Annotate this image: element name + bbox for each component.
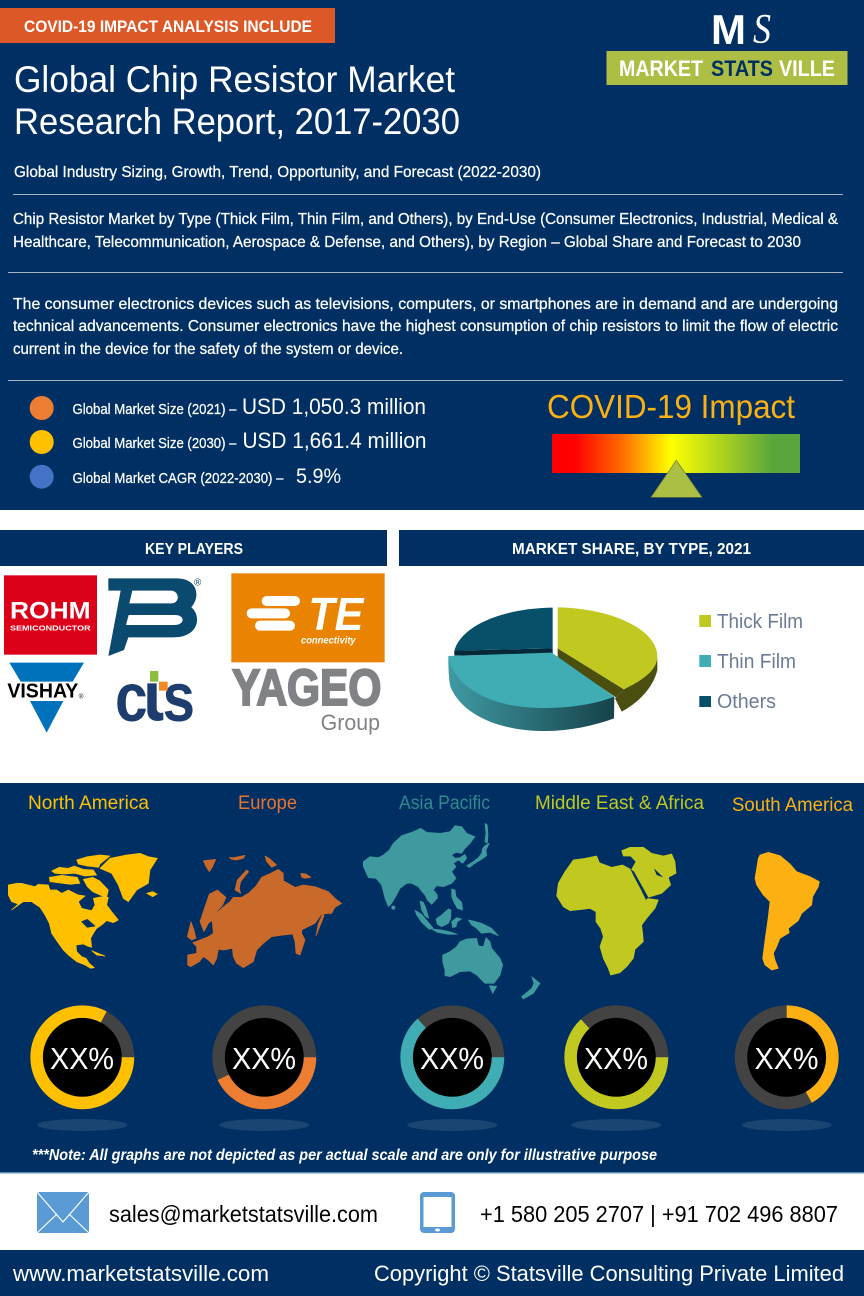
region label: south america: South America [732,795,853,816]
text block: market description [13,296,838,358]
legend item: others: Others [717,691,776,713]
chart: 3d pie [448,607,657,731]
text block: report scope [13,211,838,251]
panel: header [0,0,864,510]
logo: vishay [7,663,84,733]
panel: market share by type [399,530,864,731]
logo: te connectivity: connectivity [301,635,356,646]
logo: cts: s [163,660,195,736]
panel: regional outlook [0,783,864,1174]
logo: yageo group: Group [321,710,380,735]
stat: market size 2021 [30,394,426,420]
logo: market stats ville: STATS [711,56,773,81]
region label: asia pacific: Asia Pacific [399,793,490,814]
donut: middle east and africa [571,1012,662,1131]
logo: vishay: VISHAY [7,681,78,703]
pie slice: others [454,608,553,656]
logo: market stats ville: M [711,6,746,53]
stat: market size 2030: USD 1,661.4 million [242,428,426,453]
chart: impact gauge [552,434,800,497]
heading: market share [399,530,864,566]
donut: asia pacific: XX% [420,1041,484,1076]
heading: covid-19 impact: COVID-19 Impact [547,388,795,425]
donut: north america [37,1012,128,1131]
logo: market stats ville [606,6,848,85]
map: south america [755,852,819,970]
logo: te connectivity [231,573,385,662]
footer: copyright: Copyright © Statsville Consulting Private Limited [374,1261,844,1286]
banner: covid analysis: COVID-19 IMPACT ANALYSIS INCLUDE [24,18,312,36]
donut: south america [741,1012,832,1131]
title [14,59,460,142]
text block: market description: The consumer electronics devices such as televisions, computers, or smartphones are in demand and are undergoing [13,296,838,313]
logo: vishay: ® [79,692,84,700]
logo: rohm [4,575,97,655]
pie slice: thin film [448,653,614,731]
stat: market size 2021: USD 1,050.3 million [242,394,426,419]
title: Global Chip Resistor Market [14,59,456,100]
stat: market cagr [30,465,341,489]
donut: europe: XX% [232,1041,296,1076]
company logos [4,573,385,736]
region label: europe: Europe [238,793,297,814]
map: asia pacific [363,823,540,999]
logo: rohm: ROHM [10,598,91,625]
logo: yageo group: YAGEO [232,659,381,716]
text block: market description: current in the device for the safety of the system or device. [13,341,403,358]
donut: south america: XX% [754,1041,818,1076]
icon: envelope [37,1192,89,1233]
panel: key players [0,530,387,736]
footer: website: www.marketstatsville.com [12,1261,269,1286]
icon: gauge pointer [651,460,702,497]
logo: bourns: ® [194,578,202,589]
map: middle east and africa [557,847,676,975]
panel: contact bar [0,1174,864,1250]
donut: asia pacific [407,1012,498,1131]
logo: cts [115,660,195,736]
panel: footer [0,1250,864,1296]
region label: middle east and africa: Middle East & Africa [535,793,704,814]
logo: market stats ville: VILLE [779,56,835,81]
heading: market share: MARKET SHARE, BY TYPE, 2021 [512,541,751,558]
logo: market stats ville: S [753,7,771,53]
logo: market stats ville: MARKET [619,56,703,81]
donut: north america: XX% [50,1041,114,1076]
logo: cts: c [115,660,148,736]
stat: market size 2021: Global Market Size (2021) – [72,402,237,418]
title: Research Report, 2017-2030 [14,101,460,142]
contact: email: sales@marketstatsville.com [109,1201,378,1227]
logo: yageo group [232,659,381,735]
stat: market cagr: 5.9% [296,465,341,488]
logo: rohm: SEMICONDUCTOR [10,623,92,632]
donut: europe [219,1012,310,1131]
note: ***Note: All graphs are not depicted as per actual scale and are only for illustrative purpose [32,1147,657,1164]
stat: market size 2030: Global Market Size (2030) – [72,436,237,452]
subtitle: Global Industry Sizing, Growth, Trend, Opportunity, and Forecast (2022-2030) [14,164,541,181]
banner: covid analysis [0,8,335,43]
heading: key players: KEY PLAYERS [145,541,243,558]
heading: key players [0,530,387,566]
map: europe [187,855,342,968]
contact: phone numbers: +1 580 205 2707 | +91 702 496 8807 [480,1201,838,1227]
icon: tablet [420,1192,455,1233]
stat: market cagr: Global Market CAGR (2022-2030) – [72,471,284,487]
legend item: thick film: Thick Film [717,611,803,633]
stat: market size 2030 [30,428,426,454]
text block: report scope: Healthcare, Telecommunication, Aerospace & Defense, and Others), by Region – Global Share and Forecast to 2030 [13,234,801,251]
text block: market description: technical advancements. Consumer electronics have the highest consumption of chip resistors to limit the flow of electric [13,318,838,335]
region label: north america: North America [28,793,149,814]
map: north america [8,853,157,968]
legend [699,611,803,713]
donut: middle east and africa: XX% [584,1041,648,1076]
logo: te connectivity: TE [308,588,365,640]
text block: report scope: Chip Resistor Market by Type (Thick Film, Thin Film, and Others), by End-Use (Consumer Electronics, Industrial, Medical & [13,211,838,228]
pie slice: thick film [558,607,657,712]
legend item: thin film: Thin Film [717,651,796,673]
logo: bourns [108,578,202,656]
